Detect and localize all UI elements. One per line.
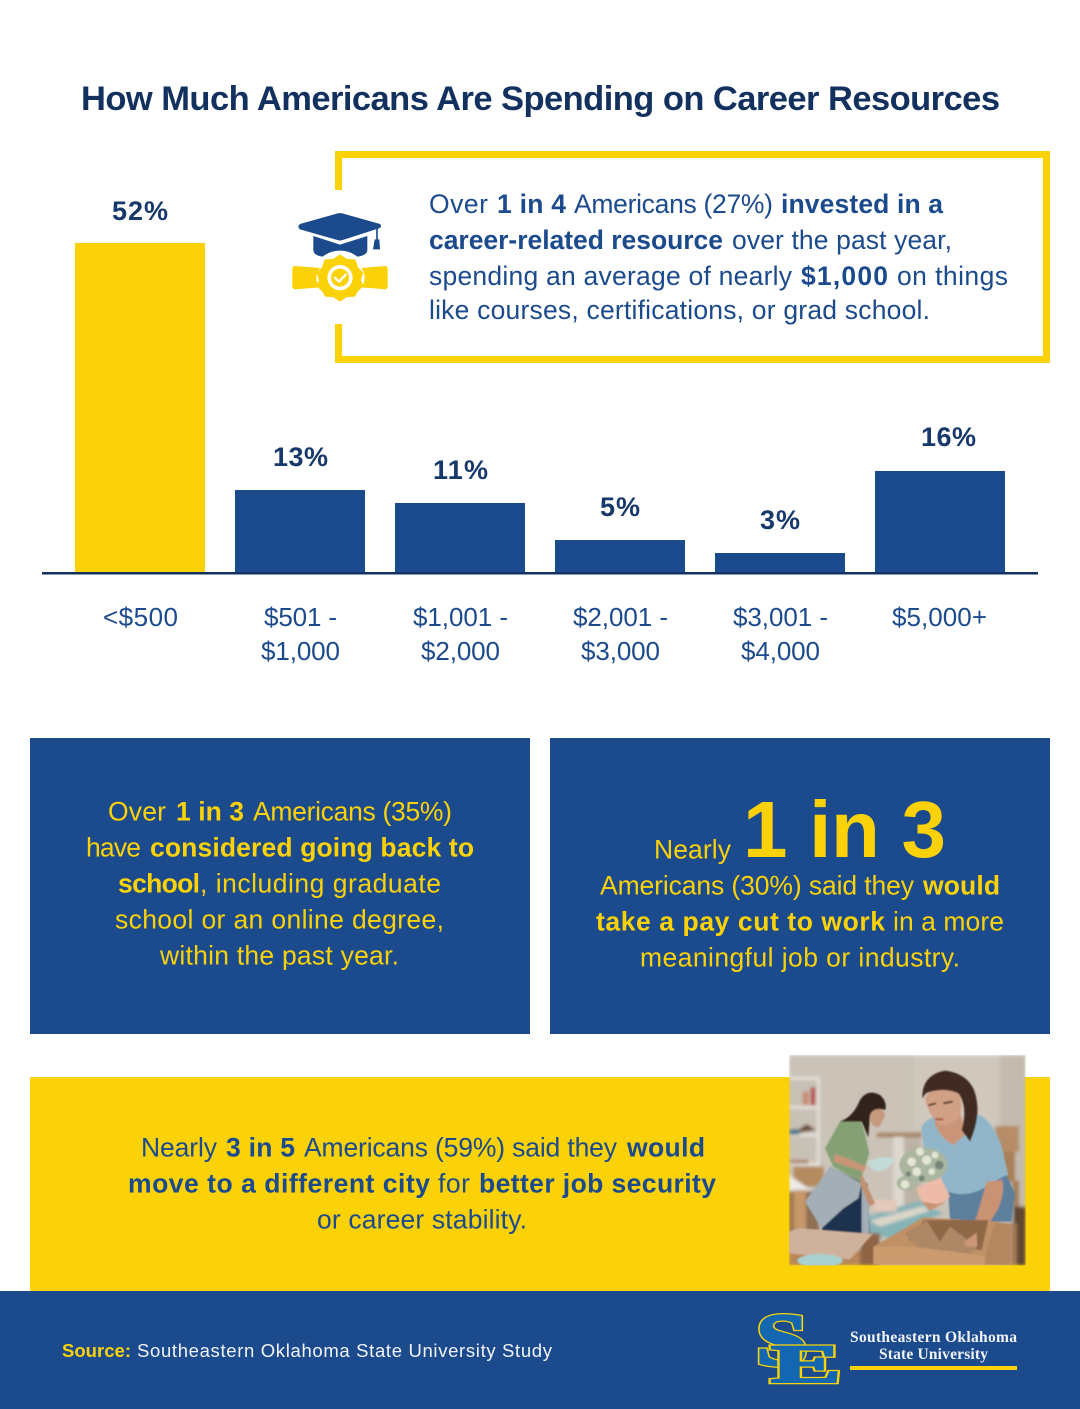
panel: pay cut: would [922,870,1000,900]
panel: back to school: school [118,868,200,898]
bar: $5,000+, 16%: $5,000+ [892,602,987,632]
panel: back to school: 1 in 3 [176,796,244,826]
logo: SE monogram and university name: E [771,1334,841,1394]
bar: under $500, 52%: <$500 [103,602,178,632]
callout text: spending an average of nearly [429,261,793,291]
source: Southeastern Oklahoma State University Study [137,1340,553,1361]
callout text: 1 in 4 [497,189,566,219]
panel: pay cut: Americans (30%) said they [600,870,915,900]
panel: pay cut: Nearly [654,834,732,864]
logo: SE monogram and university name: State University [879,1346,988,1363]
panel: move to a different city: for [438,1168,470,1198]
bar: $3,001-$4,000, 3%: $4,000 [741,636,820,666]
panel: back to school [30,738,530,1034]
bar: $501-$1,000, 13%: $501 - [264,602,337,632]
panel: pay cut: take a pay cut to work [596,906,885,936]
logo: SE monogram and university name: Southeastern Oklahoma [850,1329,1017,1346]
callout text: like courses, certifications, or grad school. [429,295,930,325]
bar: $3,001-$4,000, 3%: $3,001 - [733,602,828,632]
bar: $1,001-$2,000, 11%: $1,001 - [413,602,508,632]
callout text: invested in a [781,189,943,219]
logo: SE monogram and university name: S [756,1300,808,1382]
panel: back to school: have [86,832,141,862]
bar: $501-$1,000, 13%: $1,000 [261,636,340,666]
photo: two women packing boxes [789,1055,1026,1267]
callout frame [338,154,1046,360]
panel: move to a different city: move to a different city [128,1168,430,1198]
big stat: 1 in 3: 1 in 3 [743,785,946,874]
panel: back to school: within the past year. [159,940,399,970]
bar: $501-$1,000, 13%: 13% [273,442,328,472]
panel: move to a different city: better job security [479,1168,716,1198]
footer band [0,1291,1080,1409]
panel: move to a different city: 3 in 5 [226,1132,295,1162]
panel: move to a different city: would [626,1132,705,1162]
bar: $5,000+, 16%: 16% [921,422,976,452]
callout text [429,189,1008,325]
bar: $2,001-$3,000, 5% [555,492,685,666]
callout text: Over [429,189,488,219]
panel: back to school: , including graduate [200,868,441,898]
logo: SE monogram and university name: E [771,1334,841,1394]
callout text: over the past year, [732,225,952,255]
callout text: $1,000 [801,261,888,291]
panel: move to a different city: Nearly [141,1132,218,1162]
bar: $1,001-$2,000, 11%: $2,000 [421,636,500,666]
panel: move to a different city: Americans (59%) said they [304,1132,618,1162]
bar: $5,000+, 16% [875,422,1005,632]
bar chart: spending distribution [42,196,1038,666]
icon: graduation cap and diploma [292,213,388,302]
panel: back to school: considered going back to [150,832,474,862]
source: Source: [62,1340,131,1361]
logo: SE monogram and university name [756,1300,1017,1394]
bar: $501-$1,000, 13% [235,442,365,666]
bar: under $500, 52%: 52% [112,196,168,226]
panel: pay cut [550,738,1050,1034]
panel: back to school: Americans (35%) [253,796,452,826]
bar: $3,001-$4,000, 3% [715,505,845,666]
bar: $2,001-$3,000, 5%: $2,001 - [573,602,668,632]
panel: move to a different city [30,1077,1050,1291]
bar: $2,001-$3,000, 5%: 5% [600,492,640,522]
callout text: Americans (27%) [574,189,773,219]
title: How Much Americans Are Spending on Career Resources [81,80,1000,118]
bar: $3,001-$4,000, 3%: 3% [760,505,800,535]
bar: $2,001-$3,000, 5%: $3,000 [581,636,660,666]
panel: pay cut: meaningful job or industry. [640,942,960,972]
panel: pay cut: in a more [893,906,1004,936]
panel: move to a different city: or career stability. [317,1204,527,1234]
callout: 27% invested in career resources [292,154,1046,360]
callout text: on things [897,261,1008,291]
callout text: career-related resource [429,225,723,255]
panel: back to school: Over [108,796,166,826]
bar: $1,001-$2,000, 11% [395,455,525,666]
logo: SE monogram and university name: S [756,1300,808,1382]
bar: $1,001-$2,000, 11%: 11% [433,455,488,485]
panel: back to school: school or an online degree, [115,904,444,934]
bar: under $500, 52% [75,196,205,632]
